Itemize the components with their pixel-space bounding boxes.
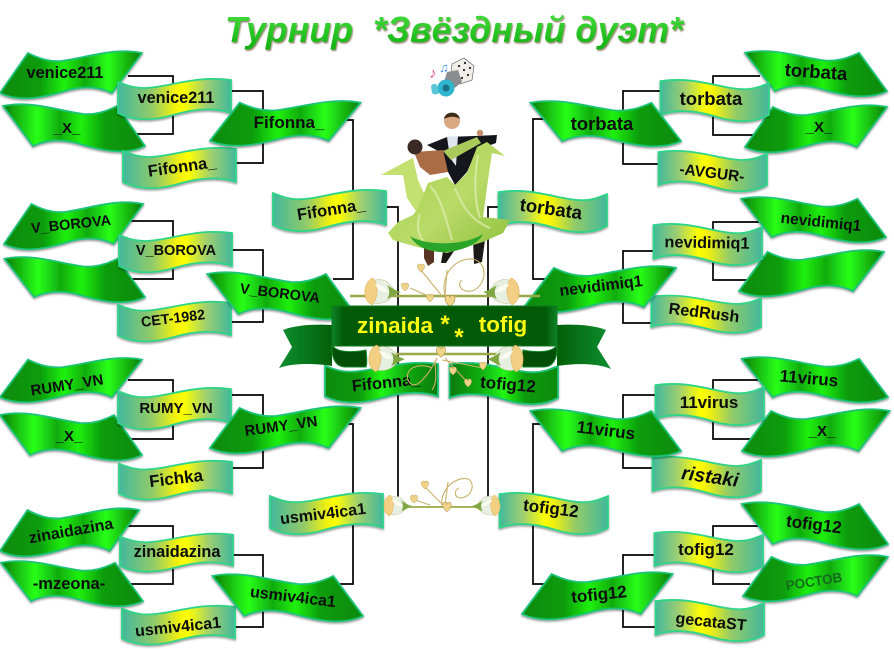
- round 2 ribbon: CET-1982: [118, 302, 231, 341]
- round 2 ribbon: tofig12: tofig12: [678, 540, 734, 559]
- round 3 ribbon: tofig12: tofig12: [570, 582, 628, 607]
- round 1 ribbon: V_BOROVA: [4, 202, 143, 249]
- round 2 ribbon: ristaki: [653, 457, 761, 497]
- round 1 ribbon: zinaidazina: [0, 508, 139, 556]
- round 1 ribbon: _X_: _X_: [55, 428, 83, 445]
- round 1 ribbon: venice211: venice211: [27, 64, 103, 82]
- round 3 ribbon: 11virus: [530, 409, 681, 456]
- dancing couple illustration: [381, 113, 510, 266]
- round 2 ribbon: Fichka: [119, 461, 232, 500]
- round 1 ribbon: venice211: [0, 51, 142, 98]
- round 2 ribbon: torbata: torbata: [680, 88, 743, 109]
- final ribbon: Fifonna_: Fifonna_: [351, 370, 422, 396]
- round 1 ribbon: torbata: torbata: [784, 59, 849, 84]
- title: Турнир *Звёздный дуэт*: [225, 9, 685, 50]
- round 3 ribbon: Fifonna_: [210, 101, 361, 146]
- final ribbon: tofig12: tofig12: [479, 373, 537, 396]
- round 2 ribbon: RUMY_VN: [118, 388, 231, 429]
- round 2 ribbon: RedRush: RedRush: [668, 300, 740, 326]
- round 1 ribbon: -mzeona-: [1, 561, 143, 606]
- banner star: *: [454, 324, 464, 351]
- round 1 ribbon: torbata: [745, 51, 887, 96]
- round 1 ribbon: empty: [739, 250, 884, 296]
- round 3 ribbon: nevidimiq1: nevidimiq1: [559, 273, 644, 300]
- ornament: top flowers: [350, 259, 540, 307]
- round 3 ribbon: tofig12: [522, 572, 673, 619]
- round 4 ribbon: torbata: [499, 191, 607, 232]
- round 3 ribbon: RUMY_VN: [210, 406, 361, 453]
- round 2 ribbon: V_BOROVA: V_BOROVA: [136, 243, 217, 259]
- woman's hair: [408, 140, 422, 154]
- round 2 ribbon: venice211: venice211: [138, 89, 214, 107]
- icon: dice and music headphones: ♫: [439, 60, 449, 75]
- round 1 ribbon: V_BOROVA: V_BOROVA: [30, 213, 112, 237]
- man's suit: [427, 135, 497, 185]
- round 1 ribbon: _X_: [0, 413, 142, 460]
- round 1 ribbon: tofig12: tofig12: [785, 512, 843, 537]
- round 1 ribbon: 11virus: [742, 357, 888, 402]
- round 4 ribbon: usmiv4ica1: usmiv4ica1: [279, 501, 367, 528]
- woman's legs: [424, 232, 434, 266]
- round 1 ribbon: tofig12: [742, 502, 888, 549]
- ornament: bottom flowers: [384, 479, 500, 516]
- round 2 ribbon: tofig12: [655, 532, 763, 572]
- round 2 ribbon: RedRush: [651, 296, 761, 333]
- round 1 ribbon: 11virus: 11virus: [779, 366, 839, 391]
- round 1 ribbon: _X_: [742, 409, 890, 456]
- round 1 ribbon: zinaidazina: zinaidazina: [28, 516, 115, 547]
- round 2 ribbon: gecataST: [656, 600, 764, 641]
- round 1 ribbon: _X_: _X_: [805, 119, 833, 136]
- round 3 ribbon: nevidimiq1: [524, 266, 676, 312]
- woman's dress: [388, 142, 510, 253]
- round 2 ribbon: gecataST: gecataST: [675, 610, 747, 635]
- round 2 ribbon: nevidimiq1: nevidimiq1: [664, 233, 750, 253]
- round 1 ribbon: _X_: _X_: [53, 120, 81, 137]
- round 2 ribbon: venice211: [118, 79, 231, 119]
- round 2 ribbon: Fichka: Fichka: [148, 466, 204, 491]
- round 2 ribbon: zinaidazina: zinaidazina: [134, 543, 221, 561]
- round 3 ribbon: 11virus: 11virus: [576, 417, 636, 443]
- banner name: zinaida: zinaida: [357, 313, 433, 338]
- dress hem: [410, 234, 483, 252]
- round 2 ribbon: usmiv4ica1: [122, 606, 235, 645]
- bracket connector lines: [128, 76, 760, 627]
- round 4 ribbon: torbata: torbata: [519, 194, 584, 223]
- woman's scarf: [381, 158, 427, 217]
- round 1 ribbon: _X_: [745, 105, 887, 152]
- round 2 ribbon: usmiv4ica1: usmiv4ica1: [134, 615, 222, 640]
- round 2 ribbon: RUMY_VN: RUMY_VN: [139, 400, 213, 417]
- man's shirt: [447, 136, 458, 166]
- round 3 ribbon: V_BOROVA: V_BOROVA: [239, 281, 321, 307]
- round 3 ribbon: RUMY_VN: RUMY_VN: [244, 413, 319, 440]
- man's legs and shoes: [441, 240, 485, 264]
- icon: dice and music headphones: ♪: [429, 65, 437, 82]
- round 1 ribbon: RUMY_VN: [0, 358, 142, 402]
- round 3 ribbon: V_BOROVA: [207, 272, 355, 319]
- round 4 ribbon: Fifonna_: [273, 190, 386, 231]
- round 1 ribbon: nevidimiq1: [741, 197, 886, 242]
- round 2 ribbon: 11virus: 11virus: [680, 393, 738, 412]
- round 3 ribbon: usmiv4ica1: usmiv4ica1: [249, 584, 337, 611]
- round 2 ribbon: V_BOROVA: [119, 232, 232, 272]
- round 1 ribbon: nevidimiq1: nevidimiq1: [780, 210, 862, 235]
- round 2 ribbon: -AVGUR-: -AVGUR-: [679, 161, 745, 186]
- icon: dice and music headphones: [429, 58, 474, 96]
- round 1 ribbon: _X_: [3, 104, 145, 151]
- round 3 ribbon: Fifonna_: Fifonna_: [254, 113, 325, 132]
- round 2 ribbon: -AVGUR-: [659, 151, 767, 191]
- round 3 ribbon: torbata: [530, 101, 681, 146]
- round 2 ribbon: 11virus: [656, 384, 764, 425]
- champion banner: zinaida * * tofig: [279, 306, 611, 369]
- round 2 ribbon: Fifonna_: Fifonna_: [147, 153, 218, 181]
- round 1 ribbon: RUMY_VN: RUMY_VN: [30, 371, 105, 400]
- ornament: lower banner flowers: [369, 345, 523, 390]
- banner right fold: [522, 345, 557, 367]
- round 2 ribbon: nevidimiq1: [654, 224, 762, 265]
- round 1 ribbon: empty: [4, 257, 145, 302]
- banner name: tofig: tofig: [479, 312, 527, 337]
- round 1 ribbon: -mzeona-: -mzeona-: [33, 575, 105, 593]
- round 2 ribbon: CET-1982: CET-1982: [140, 307, 206, 331]
- round 2 ribbon: ristaki: ristaki: [680, 462, 741, 492]
- round 3 ribbon: torbata: torbata: [571, 113, 634, 134]
- round 4 ribbon: tofig12: [500, 493, 608, 534]
- round 4 ribbon: Fifonna_: Fifonna_: [296, 196, 367, 224]
- round 2 ribbon: zinaidazina: [120, 534, 233, 572]
- man's raised hand: [477, 130, 483, 136]
- banner main panel: [332, 306, 557, 346]
- banner left tail: [279, 325, 332, 368]
- final ribbon: tofig12: [450, 363, 558, 404]
- round 1 ribbon: _X_: _X_: [808, 423, 836, 440]
- round 4 ribbon: tofig12: tofig12: [522, 496, 580, 521]
- woman's bare back: [414, 150, 448, 175]
- dress highlight folds: [418, 155, 490, 242]
- man's head: [444, 113, 460, 129]
- banner left fold: [332, 345, 367, 367]
- banner star: *: [440, 311, 450, 338]
- round 1 ribbon: РОСТОВ: РОСТОВ: [785, 570, 844, 593]
- round 3 ribbon: usmiv4ica1: [212, 574, 363, 621]
- round 4 ribbon: usmiv4ica1: [270, 493, 383, 534]
- round 2 ribbon: torbata: [661, 80, 769, 121]
- woman's arm sleeve: [443, 137, 481, 160]
- round 2 ribbon: Fifonna_: [123, 148, 236, 188]
- round 1 ribbon: РОСТОВ: [743, 555, 888, 601]
- banner right tail: [557, 325, 611, 369]
- final ribbon: Fifonna_: [325, 363, 438, 402]
